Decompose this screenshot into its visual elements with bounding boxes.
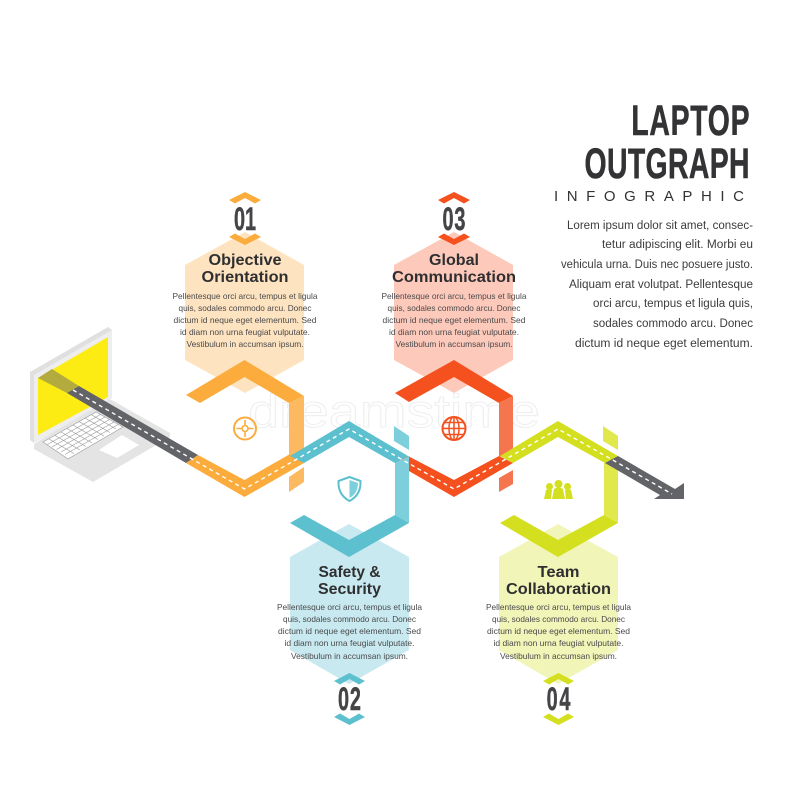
title: OUTGRAPH [584,139,750,187]
body text 04: id diam non urna feugiat vulputate. [494,638,624,648]
body text 03: Pellentesque orci arcu, tempus et ligula [382,291,527,301]
body text 02: Vestibulum in accumsan ipsum. [291,651,408,661]
panel: step 03 global communication [382,192,527,393]
chevron bottom 02 [334,714,365,725]
laptop screen [38,337,108,435]
icon: compass [234,418,256,440]
road from laptop [67,386,198,463]
chevron top 04 [543,673,574,684]
hexagon background 03 [394,232,513,393]
intro text block: Lorem ipsum dolor sit amet, consec- [567,220,753,232]
body text 03: id diam non urna feugiat vulputate. [389,327,519,337]
ribbon: lime hexagon [500,421,618,557]
chevron top 03 [438,192,470,204]
chevron top 01 [229,192,261,204]
lime bottom arc [500,515,618,557]
intro text block: orci arcu, tempus et ligula quis, [593,298,753,310]
icon: globe [442,417,466,440]
body text 01: dictum id neque eget elementum. Sed [174,315,317,325]
orange top arc [186,360,304,403]
intro text block [561,220,753,350]
body text 02: dictum id neque eget elementum. Sed [278,626,421,636]
teal top road [290,421,408,463]
laptop lid [30,327,112,443]
number 02: 02 [338,681,361,717]
number 04: 04 [547,681,571,717]
body text 02 [277,602,422,661]
heading 04: Collaboration [506,581,611,598]
hexagon background 04 [499,524,618,684]
keyboard [43,412,123,459]
red right side [499,396,513,460]
body text 01: Pellentesque orci arcu, tempus et ligula [172,291,318,301]
lime right side [603,426,618,450]
intro text block: dictum id neque eget elementum. [575,338,753,350]
body text 04: quis, sodales commodo arcu. Donec [492,614,625,624]
intro text block: vehicula urna. Duis nec posuere justo. [561,259,753,271]
road shadow on screen [38,369,79,393]
chevron top 02 [334,673,365,684]
body text 02: Pellentesque orci arcu, tempus et ligula [277,602,422,612]
body text 03: quis, sodales commodo arcu. Donec [388,303,520,313]
body text 01 [172,291,318,349]
panel: step 04 team collaboration [486,524,631,725]
touchpad [99,435,139,458]
body text 03: Vestibulum in accumsan ipsum. [396,339,512,349]
ribbon: teal hexagon [290,421,409,557]
icon: shield [338,477,361,501]
ribbon: red hexagon [395,360,513,497]
heading 01: Orientation [202,269,288,286]
body text 04: dictum id neque eget elementum. Sed [487,626,630,636]
body text 04: Vestibulum in accumsan ipsum. [500,651,617,661]
heading 02: Safety & [318,564,380,581]
laptop base [34,398,170,482]
body text 04 [486,602,631,661]
heading 02: Security [318,581,381,598]
orange bottom road [186,454,304,497]
title [584,96,750,187]
hexagon background 01 [185,232,304,393]
chevron bottom 04 [543,714,574,725]
body text 03 [382,291,527,349]
heading 02 [318,564,381,598]
road arrow [605,456,684,499]
body text 02: quis, sodales commodo arcu. Donec [283,614,416,624]
body text 01: quis, sodales commodo arcu. Donec [178,303,312,313]
heading 04: Team [538,564,580,581]
number 03: 03 [443,201,465,237]
chevron bottom 03 [438,234,470,245]
laptop [30,327,170,482]
body text 03: dictum id neque eget elementum. Sed [382,315,526,325]
panel: step 02 safety and security [277,524,422,725]
body text 01: id diam non urna feugiat vulputate. [180,327,310,337]
body text 04: Pellentesque orci arcu, tempus et ligula [486,602,631,612]
hexagon background 02 [290,524,409,684]
chevron bottom 01 [229,234,261,245]
heading 01: Objective [208,252,282,269]
faint stock watermark: dreamstime [248,385,540,437]
intro text block: Aliquam erat volutpat. Pellentesque [569,279,753,291]
teal right side [394,426,409,450]
road centre dashes [73,390,672,494]
red top arc [395,360,513,403]
subtitle: INFOGRAPHIC [554,188,744,205]
intro text block: tetur adipiscing elit. Morbi eu [602,239,753,251]
panel: step 01 objective orientation [172,192,318,393]
body text 01: Vestibulum in accumsan ipsum. [186,339,304,349]
heading 04 [506,564,611,598]
lime top road [500,421,618,463]
ribbon: orange hexagon [186,360,304,497]
body text 02: id diam non urna feugiat vulputate. [284,638,414,648]
heading 03 [392,252,516,286]
heading 03: Communication [392,269,516,286]
heading 01 [202,252,288,286]
orange right side [289,396,304,459]
red bottom road [395,456,513,497]
title: LAPTOP [631,96,750,144]
heading 03: Global [429,252,479,269]
intro text block: sodales commodo arcu. Donec [593,318,753,330]
icon: team [544,480,573,499]
teal bottom arc [290,515,409,557]
number 01: 01 [234,201,256,237]
